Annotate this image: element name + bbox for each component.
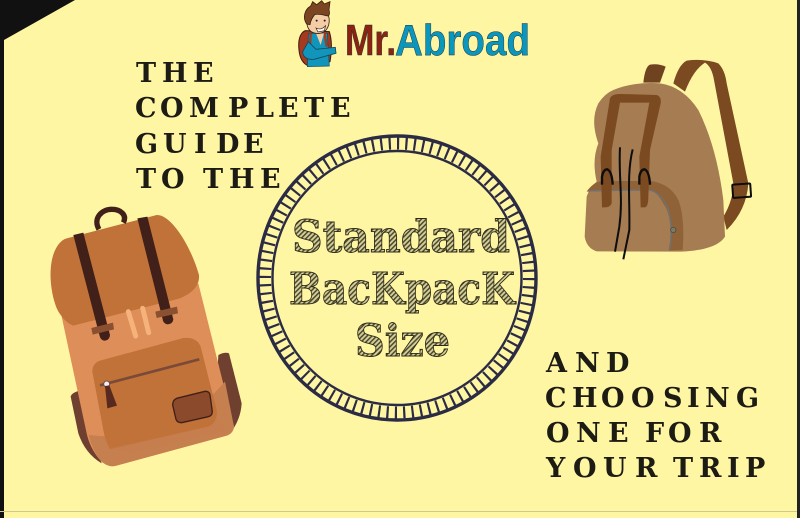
heading: bottom right: AND [545, 348, 629, 379]
heading: bottom right: YOUR TRIP [545, 453, 765, 484]
heading: bottom right [545, 348, 765, 484]
ring [258, 136, 536, 420]
heading: top left: GUIDE [135, 129, 264, 160]
side pockets [71, 391, 102, 463]
zipper [100, 359, 199, 385]
heading: top left: THE [136, 58, 214, 89]
icon: traveller mascot [299, 1, 336, 67]
heading: top left: COMPLETE [135, 93, 351, 124]
front pocket trim [587, 181, 683, 251]
title text: Standard [292, 212, 510, 263]
title text: BacKpacK [289, 264, 517, 315]
heading: top left: TO THE [136, 164, 281, 195]
lower panel [89, 382, 234, 466]
buckles [91, 323, 114, 335]
title text: Size [355, 316, 450, 367]
logo wordmark: Abroad [395, 16, 530, 65]
heading: top left [135, 58, 351, 195]
badge: circle with title [258, 136, 536, 420]
logo: Mr.Abroad [299, 1, 530, 67]
heading: bottom right: CHOOSING [545, 383, 759, 414]
cords [615, 147, 633, 259]
front pocket [92, 338, 217, 449]
handle [97, 209, 125, 229]
strap slider [732, 183, 751, 198]
logo wordmark: Mr. [345, 16, 396, 65]
light stripes [128, 308, 149, 336]
illustration: tan backpack [585, 60, 751, 259]
title text [289, 212, 517, 367]
front straps [601, 94, 661, 207]
buckles [602, 169, 650, 185]
illustration: orange backpack [51, 209, 242, 466]
heading: bottom right: ONE FOR [546, 418, 722, 449]
shoulder strap [673, 60, 748, 230]
top loop [643, 64, 666, 83]
body [585, 83, 725, 252]
straps [73, 233, 110, 341]
patch [173, 391, 212, 423]
backpack body [62, 283, 234, 466]
top flap [51, 215, 199, 326]
